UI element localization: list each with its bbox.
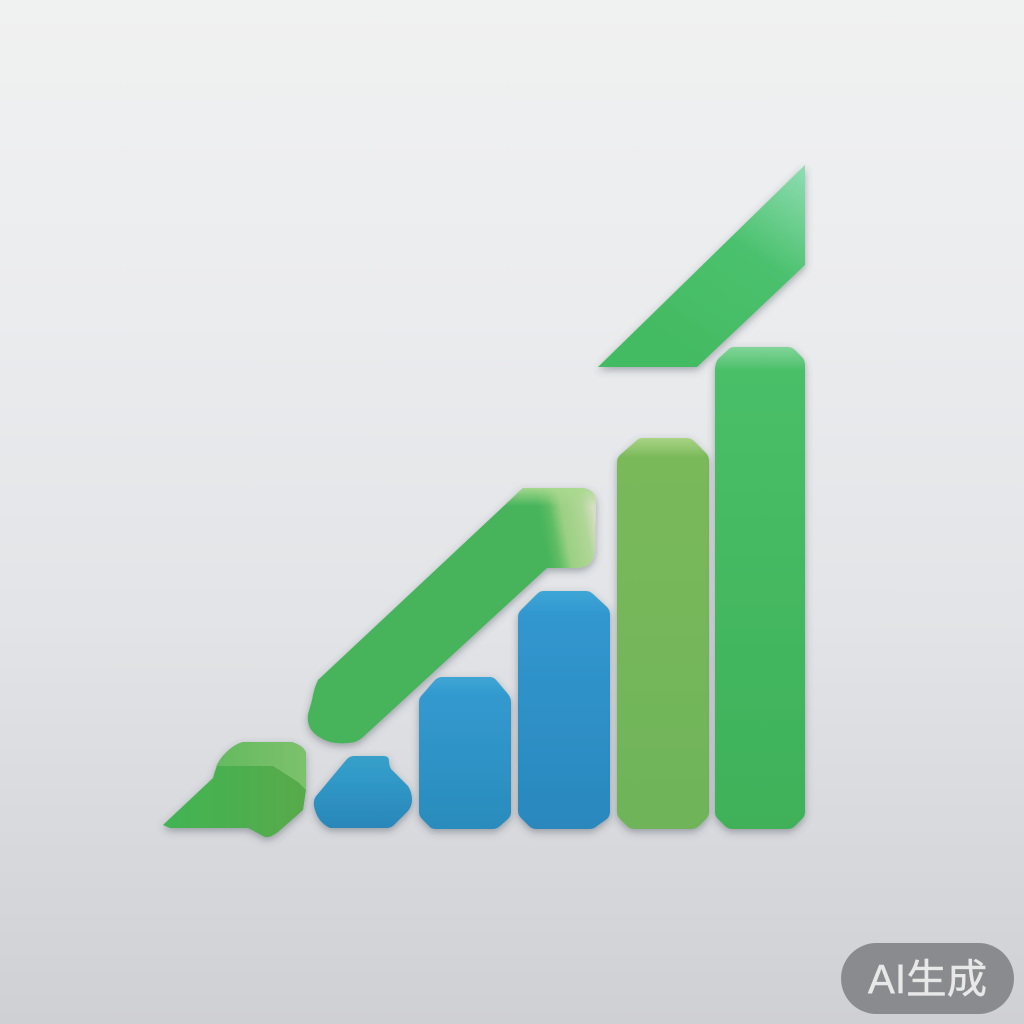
bar 5 green	[715, 347, 805, 829]
badge: AI generated: AI生成	[868, 956, 987, 1002]
bar 2 blue	[419, 677, 511, 829]
bar 1 blue	[314, 756, 412, 828]
bar 4 lime	[617, 438, 709, 829]
arrow head	[598, 165, 805, 367]
arrow tail	[163, 742, 306, 837]
badge: AI generated	[841, 943, 1014, 1014]
arrow shaft	[308, 488, 596, 743]
bar 3 blue	[518, 591, 610, 829]
